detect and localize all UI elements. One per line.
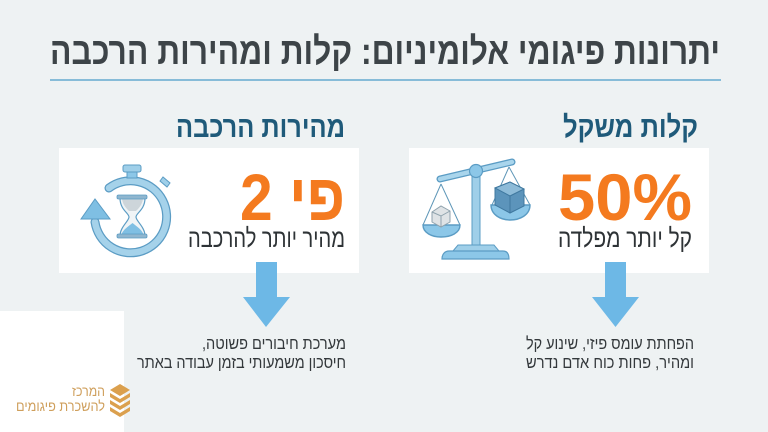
heading: weight: קלות משקל xyxy=(563,111,698,144)
stat label: מהיר יותר להרכבה xyxy=(188,223,345,253)
arrow: speed xyxy=(243,262,290,327)
stat: times 2: פי 2 xyxy=(240,160,345,234)
panel: speed xyxy=(59,148,359,273)
heading: speed: מהירות הרכבה xyxy=(176,111,345,144)
text block: weight benefits: הפחתת עומס פיזי, שינוע קל xyxy=(526,334,694,353)
icon: balance scale xyxy=(423,162,530,259)
arrow: weight xyxy=(592,262,639,327)
logo text: המרכז xyxy=(72,383,105,399)
icon: stopwatch with hourglass xyxy=(81,165,170,253)
text block: speed benefits xyxy=(137,334,346,372)
logo panel xyxy=(0,311,130,432)
logo text: להשכרת פיגומים xyxy=(16,398,105,414)
text block: weight benefits xyxy=(526,334,694,372)
text block: weight benefits: ומהיר, פחות כוח אדם נדרש xyxy=(526,353,694,372)
stat label: קל יותר מפלדה xyxy=(558,223,692,253)
icon: logo stack xyxy=(110,384,130,417)
text block: speed benefits: חיסכון משמעותי בזמן עבודה באתר xyxy=(137,353,346,372)
logo text xyxy=(16,383,105,414)
text block: speed benefits: מערכת חיבורים פשוטה, xyxy=(202,334,346,353)
panel: weight xyxy=(409,148,709,273)
stat: 50%: 50% xyxy=(558,160,692,234)
